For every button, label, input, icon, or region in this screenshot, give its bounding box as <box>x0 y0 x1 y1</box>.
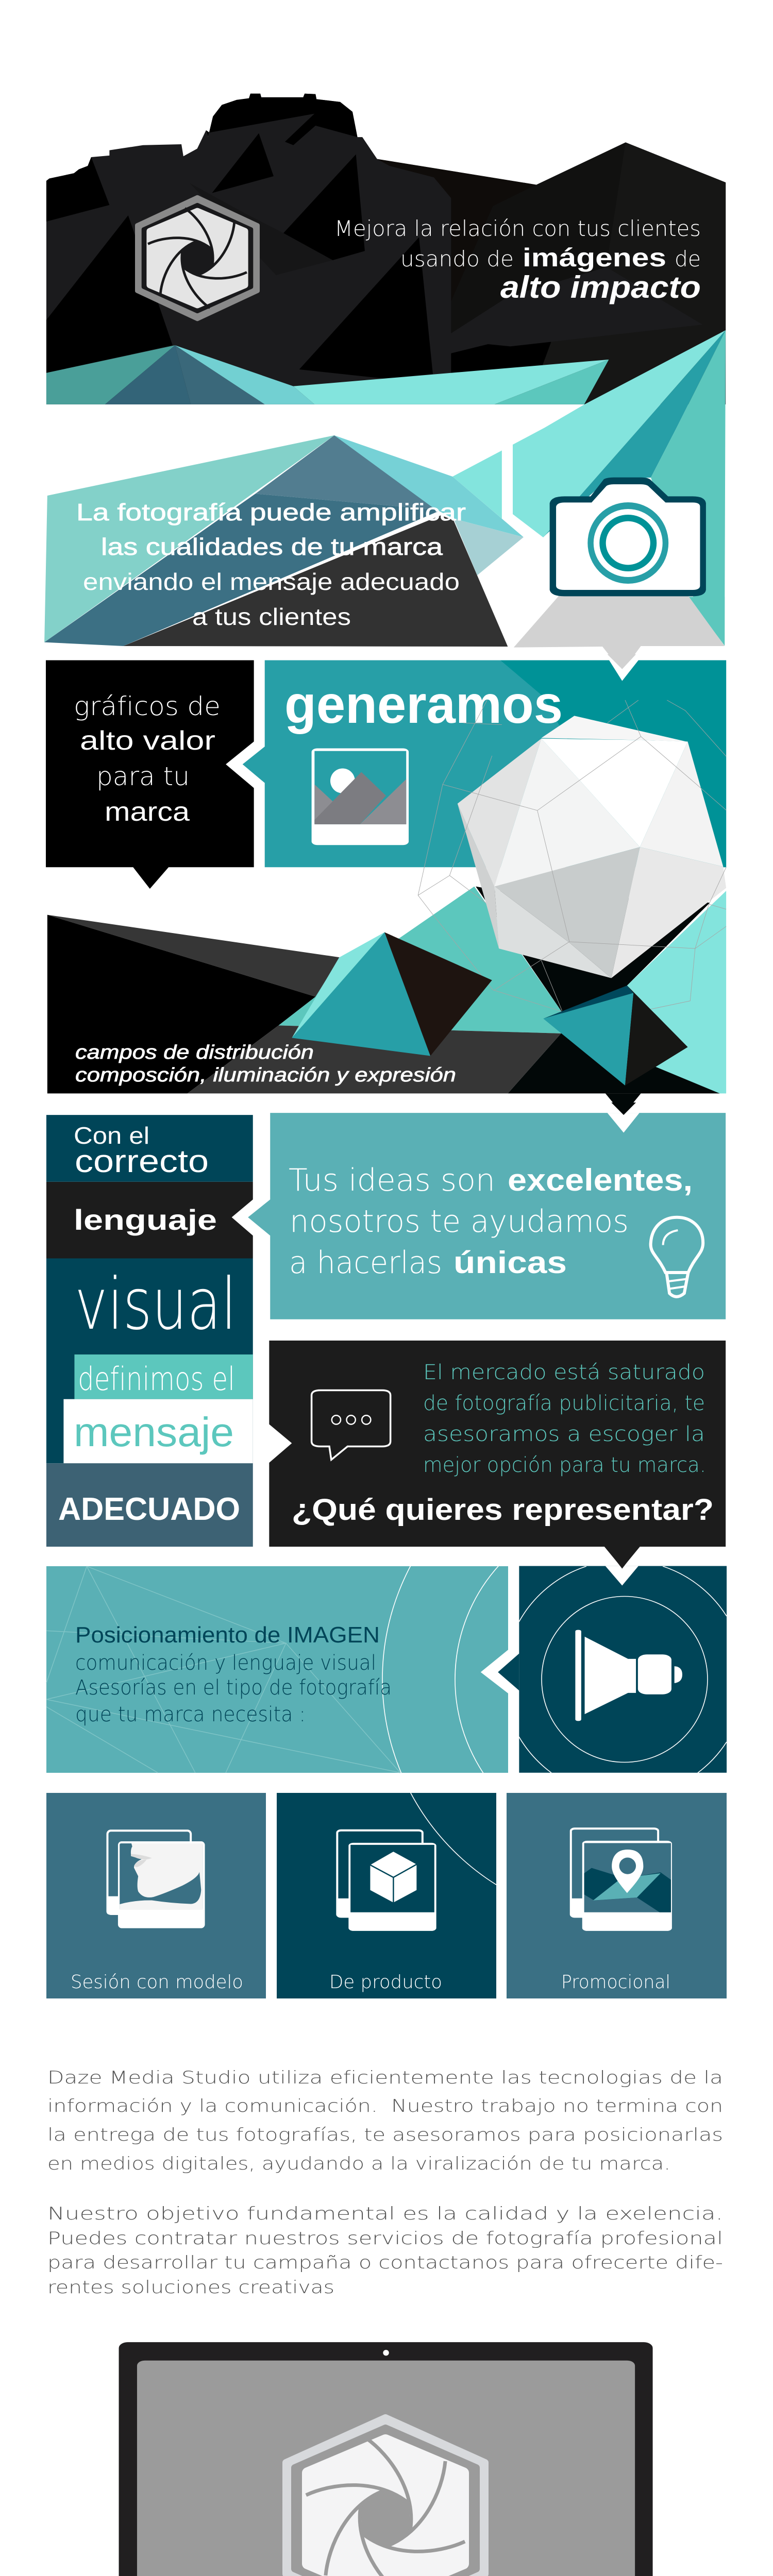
icon: polygon gem <box>418 700 726 1011</box>
panel: graphics value black box <box>46 660 254 889</box>
text: market message: asesoramos a escoger la <box>423 1422 705 1446</box>
text: graphics value: para tu <box>96 761 190 791</box>
icon: product photos <box>337 1831 436 1931</box>
text: market message: mejor opción para tu marca. <box>423 1453 706 1477</box>
text: market message: de fotografía publicitaria, te <box>423 1392 705 1415</box>
text: market message <box>292 1361 714 1527</box>
text: hero headline: de <box>675 246 701 272</box>
text: hero headline: usando de <box>400 246 514 272</box>
panel: model session card <box>46 1793 266 1998</box>
text: body paragraph one <box>47 2067 723 2174</box>
text: brand message: las cualidades de tu marca <box>101 533 443 560</box>
text: body paragraph one: información y la comunicación. Nuestro trabajo no termina con <box>47 2096 723 2116</box>
text: body paragraph two <box>47 2204 723 2298</box>
icon: hero aperture logo <box>137 197 258 319</box>
icon: laptop <box>49 2342 722 2576</box>
panel: language column <box>46 1115 253 1547</box>
label: model session: Sesión con modelo <box>71 1972 243 1993</box>
decoration: product ring <box>410 1793 496 1886</box>
text: hero headline: Mejora la relación con tus clientes <box>334 216 701 241</box>
text: market message: El mercado está saturado <box>423 1361 705 1384</box>
icon: light bulb <box>651 1217 703 1297</box>
icon: model photos <box>106 1831 205 1928</box>
text: ideas: únicas <box>453 1245 567 1280</box>
text: graphics value: alto valor <box>80 726 215 756</box>
text: body paragraph one: en medios digitales, ayudando a la viralización de tu marca. <box>47 2154 670 2174</box>
label: product: De producto <box>329 1972 442 1993</box>
text: graphics value: gráficos de <box>74 691 221 721</box>
panel: product card <box>277 1793 496 1998</box>
icon: camera with pointer <box>514 478 725 671</box>
text: ideas: Tus ideas son <box>289 1162 495 1198</box>
text: language column words: correcto <box>75 1144 209 1179</box>
text: ideas: excelentes, <box>508 1163 693 1197</box>
text: language column words: mensaje <box>74 1409 234 1455</box>
text: graphics value: marca <box>105 797 190 827</box>
panel: generamos teal panel <box>243 654 726 867</box>
text: language column words: ADECUADO <box>58 1492 240 1527</box>
text: brand message: a tus clientes <box>192 603 351 630</box>
panel: hero camera silhouette <box>46 94 726 404</box>
text: ideas <box>289 1162 693 1281</box>
text: positioning <box>75 1622 392 1726</box>
text: brand message: La fotografía puede amplificar <box>76 499 466 526</box>
text: ideas: nosotros te ayudamos <box>290 1204 629 1240</box>
decoration: speaker rings <box>519 1566 727 1773</box>
panel: ideas <box>248 1103 726 1319</box>
icon: pyramids <box>292 933 687 1086</box>
text: language column words: Con el <box>74 1122 149 1149</box>
panel: market message <box>269 1341 726 1568</box>
text: body paragraph two: Nuestro objetivo fundamental es la calidad y la exelencia. <box>47 2204 723 2224</box>
text: language column words: lenguaje <box>74 1204 217 1236</box>
text: graphics value <box>74 691 221 827</box>
icon: picture frame <box>312 749 409 845</box>
panel: lower distribution polygon <box>47 887 726 1115</box>
decoration: positioning rings <box>382 1566 499 1773</box>
heading: generamos: generamos <box>284 675 563 735</box>
panel: positioning <box>46 1566 508 1773</box>
text: body paragraph two: rentes soluciones creativas <box>47 2277 334 2298</box>
panel: promotional card <box>507 1793 727 1998</box>
panel: brand message polygon <box>44 435 524 647</box>
text: hero headline <box>334 216 701 304</box>
text: language column words <box>58 1122 240 1527</box>
text: language column words: visual <box>75 1263 237 1346</box>
icon: speaker <box>575 1630 682 1721</box>
text: positioning: Posicionamiento de IMAGEN <box>75 1622 380 1648</box>
text: brand message: enviando el mensaje adecuado <box>83 568 460 595</box>
label: promotional: Promocional <box>561 1972 670 1993</box>
text: distribution caption: composción, iluminación y expresión <box>75 1064 456 1086</box>
text: ideas: a hacerlas <box>289 1245 442 1281</box>
text: positioning: Asesorías en el tipo de fotografía <box>75 1676 392 1700</box>
text: language column words: definimos el <box>78 1360 235 1398</box>
text: hero headline: alto impacto <box>500 270 701 304</box>
icon: promotional photos <box>571 1828 672 1931</box>
text: positioning: que tu marca necesita : <box>75 1703 306 1726</box>
text: body paragraph two: Puedes contratar nuestros servicios de fotografía profesional <box>47 2228 723 2249</box>
icon: laptop aperture logo <box>286 2418 485 2576</box>
text: body paragraph one: la entrega de tus fotografías, te asesoramos para posicionarlas <box>47 2125 723 2145</box>
panel: speaker panel <box>481 1546 727 1773</box>
text: brand message <box>76 499 466 630</box>
panel: teal mountain shards <box>513 330 726 646</box>
text: body paragraph one: Daze Media Studio utiliza eficientemente las tecnologias de la <box>47 2067 723 2088</box>
icon: chat bubble <box>312 1390 391 1460</box>
text: market message: ¿Qué quieres representar? <box>292 1493 714 1527</box>
text: hero headline: imágenes <box>523 243 666 272</box>
decoration: positioning web lines <box>46 1566 400 1773</box>
text: distribution caption <box>75 1042 456 1086</box>
text: body paragraph two: para desarrollar tu campaña o contactanos para ofrecerte dife- <box>47 2252 723 2273</box>
text: distribution caption: campos de distribución <box>75 1042 314 1063</box>
text: positioning: comunicación y lenguaje visual <box>75 1651 376 1675</box>
